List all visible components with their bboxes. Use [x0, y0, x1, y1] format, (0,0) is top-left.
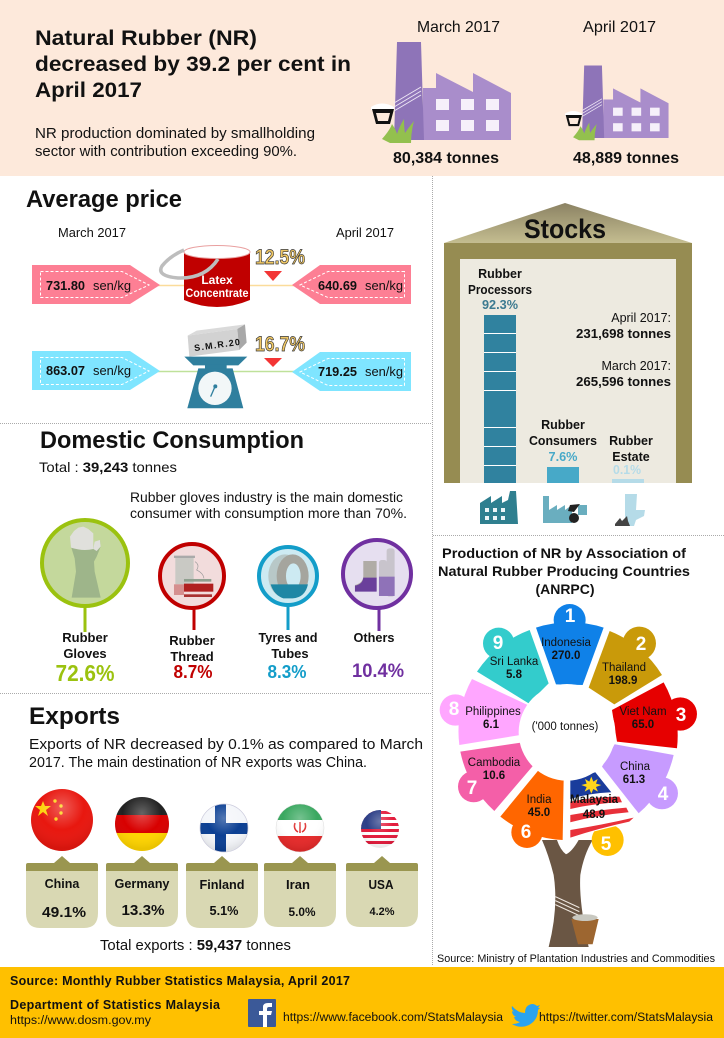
item: tyres and tubes: [258, 547, 318, 682]
card: China: [26, 856, 98, 928]
icon: latex bucket: Latex: [201, 273, 233, 287]
panel: exports: [26, 703, 423, 954]
icon: latex bucket: Concentrate: [186, 286, 249, 300]
change: SMR -16.7%: 16.7%: [255, 333, 305, 356]
icon: factory March: [371, 42, 511, 143]
bar: rubber consumers: Consumers: [529, 434, 597, 448]
heading: Exports: [29, 703, 120, 730]
panel: stocks: [444, 203, 692, 526]
heading: Domestic Consumption: [40, 427, 304, 454]
department: [10, 998, 221, 1027]
tag: latex April price: [292, 265, 411, 304]
tag: latex April price: sen/kg: [365, 278, 403, 293]
connector: latex: [158, 284, 294, 286]
label: March column: March 2017: [58, 226, 126, 240]
petal values: Sri Lanka: [490, 656, 539, 668]
petal numbers: 8: [449, 699, 459, 720]
total: Total : 39,243 tonnes: [39, 459, 177, 475]
flag: Germany: [115, 797, 169, 851]
bar: rubber estate: [609, 434, 653, 483]
heading: Natural Rubber Producing Countries: [438, 563, 690, 579]
petal values: [465, 637, 667, 821]
title: decreased by 39.2 per cent in: [35, 53, 351, 76]
panel: ANRPC production: [437, 545, 715, 965]
title: [35, 27, 351, 102]
petal values: 5.8: [506, 669, 523, 681]
petal values: 198.9: [609, 675, 637, 687]
source line: Source: Monthly Rubber Statistics Malaysia, April 2017: [10, 974, 350, 988]
card: Iran: Iran: [286, 878, 310, 892]
bar: rubber consumers: [529, 418, 597, 483]
tag: SMR March price: [32, 351, 160, 390]
intro text: NR production dominated by smallholding: [35, 126, 315, 142]
label: April 2017: April 2017: [583, 19, 656, 36]
tag: SMR March price: sen/kg: [93, 363, 131, 378]
card: Germany: 13.3%: [122, 902, 164, 919]
bar: rubber estate: Estate: [612, 450, 650, 464]
icon: processors factory: [480, 491, 518, 524]
petal values: 65.0: [632, 719, 654, 731]
item: tyres and tubes: 8.3%: [268, 661, 306, 682]
icon: factory April: [565, 65, 669, 140]
tag: latex March price: sen/kg: [93, 278, 131, 293]
stock totals: 231,698 tonnes: [576, 326, 671, 341]
heading: Stocks: [524, 214, 606, 244]
department: https://www.dosm.gov.my: [10, 1015, 151, 1027]
petal values: Thailand: [602, 662, 646, 674]
petal numbers: 7: [467, 778, 477, 799]
intro text: sector with contribution exceeding 90%.: [35, 144, 297, 160]
bar: rubber estate: Rubber: [609, 434, 653, 448]
icon: facebook: [248, 999, 276, 1027]
icon: twitter: [512, 1004, 540, 1027]
title: Natural Rubber (NR): [35, 27, 257, 50]
facebook url: https://www.facebook.com/StatsMalaysia: [283, 1012, 504, 1024]
flag: Finland: [200, 804, 248, 852]
item: rubber thread: [160, 544, 224, 682]
heading: (ANRPC): [535, 581, 595, 597]
petals: [440, 604, 697, 856]
petal numbers: 3: [676, 705, 686, 726]
tree trunk: [542, 840, 599, 947]
tag: latex March price: 731.80: [46, 278, 85, 293]
stock totals: 265,596 tonnes: [576, 374, 671, 389]
card: USA: USA: [368, 878, 394, 892]
card: USA: 4.2%: [370, 906, 395, 918]
heading: [438, 545, 690, 597]
panel: domestic consumption: [39, 427, 411, 686]
intro text: [35, 126, 315, 160]
item: rubber gloves: [42, 520, 128, 686]
panel: footer: [0, 967, 724, 1038]
stock totals: March 2017:: [602, 359, 671, 373]
description: consumer with consumption more than 70%.: [130, 506, 407, 521]
card: Finland: [186, 856, 258, 928]
change: latex -12.5%: [255, 246, 305, 281]
stock totals: [576, 311, 671, 389]
petal values: Malaysia: [570, 794, 619, 806]
department: Department of Statistics Malaysia: [10, 998, 221, 1012]
card: Finland: 5.1%: [210, 903, 239, 918]
petal values: Viet Nam: [619, 706, 667, 718]
icon: SMR20 block on scale: [184, 324, 247, 408]
item: rubber gloves: 72.6%: [56, 660, 114, 686]
icon: estate: [615, 494, 645, 526]
petal values: 270.0: [552, 650, 580, 662]
tag: SMR April price: [292, 352, 411, 391]
petal values: 10.6: [483, 770, 505, 782]
stock totals: April 2017:: [611, 311, 671, 325]
card: Germany: [106, 856, 178, 927]
flag: Iran: [276, 804, 324, 852]
bar: rubber processors: [468, 267, 532, 483]
bar: rubber processors: Rubber: [478, 267, 522, 281]
panel: header: [0, 0, 724, 176]
card: USA: [346, 856, 418, 927]
petal values: Philippines: [465, 706, 521, 718]
value: April tonnes: 48,889 tonnes: [573, 150, 679, 167]
tag: latex April price: 640.69: [318, 278, 357, 293]
bar: rubber consumers: Rubber: [541, 418, 585, 432]
petal values: 48.9: [583, 809, 605, 821]
tag: SMR April price: 719.25: [318, 364, 357, 379]
change: latex -12.5%: 12.5%: [255, 246, 305, 269]
bar: rubber estate: 0.1%: [613, 462, 641, 477]
petal values: 45.0: [528, 807, 550, 819]
petal values: China: [620, 761, 651, 773]
flag: China: [31, 789, 93, 851]
label: March 2017: March 2017: [417, 19, 500, 36]
icon: latex bucket: [161, 246, 250, 307]
description: Rubber gloves industry is the main domestic: [130, 490, 403, 505]
item: others: [343, 540, 411, 682]
card: Germany: Germany: [114, 877, 170, 891]
total exports: Total exports : 59,437 tonnes: [100, 938, 291, 954]
item: others: 10.4%: [352, 661, 404, 682]
description: 2017. The main destination of NR exports was China.: [29, 755, 367, 771]
description: [130, 490, 407, 521]
heading: Average price: [26, 186, 182, 213]
house frame: [444, 203, 692, 483]
item: tyres and tubes: Tubes: [271, 646, 309, 661]
card: China: China: [45, 877, 80, 891]
petal numbers: 9: [493, 633, 503, 654]
petal numbers: 6: [521, 822, 531, 843]
flag: USA: [361, 810, 399, 848]
description: Exports of NR decreased by 0.1% as compared to March: [29, 737, 423, 753]
petal values: India: [527, 794, 552, 806]
petal values: 6.1: [483, 719, 500, 731]
item: others: Others: [354, 630, 394, 645]
item: tyres and tubes: Tyres and: [258, 630, 318, 645]
tag: SMR March price: 863.07: [46, 363, 85, 378]
title: April 2017: [35, 79, 142, 102]
card: Iran: 5.0%: [288, 905, 316, 919]
item: rubber thread: 8.7%: [174, 661, 212, 682]
value: March tonnes: 80,384 tonnes: [393, 150, 499, 167]
card: Finland: Finland: [200, 878, 244, 892]
heading: Production of NR by Association of: [442, 545, 686, 561]
twitter url: https://twitter.com/StatsMalaysia: [539, 1012, 714, 1024]
petal numbers: 5: [601, 834, 612, 855]
tag: latex March price: [32, 265, 160, 304]
icon: SMR20 block on scale: S.M.R.20: [194, 337, 240, 353]
panel: average price: [26, 186, 411, 408]
Malaysia flag petal: [570, 772, 634, 838]
card: Iran: [264, 856, 336, 927]
change: SMR -16.7%: [255, 333, 305, 367]
bar: rubber processors: 92.3%: [482, 297, 518, 312]
petal values: Cambodia: [468, 757, 521, 769]
label: April column: April 2017: [336, 226, 394, 240]
bar: rubber processors: Processors: [468, 283, 532, 297]
tag: SMR April price: sen/kg: [365, 364, 403, 379]
item: rubber thread: Rubber: [169, 633, 215, 648]
description: [29, 737, 423, 771]
petal numbers: [449, 606, 686, 855]
item: rubber thread: Thread: [170, 649, 214, 664]
item: rubber gloves: Gloves: [63, 646, 107, 661]
icon: consumers factory: [543, 496, 587, 523]
petal numbers: 4: [658, 784, 669, 805]
petal numbers: 2: [636, 634, 646, 655]
bar: rubber consumers: 7.6%: [548, 449, 578, 464]
petal values: Indonesia: [541, 637, 592, 649]
connector: SMR: [158, 370, 294, 372]
petal values: ('000 tonnes): [532, 721, 599, 733]
source note: Source: Ministry of Plantation Industries and Commodities: [437, 953, 715, 965]
petal numbers: 1: [565, 606, 576, 627]
petal values: 61.3: [623, 774, 645, 786]
card: China: 49.1%: [42, 904, 86, 921]
item: rubber gloves: Rubber: [62, 630, 108, 645]
